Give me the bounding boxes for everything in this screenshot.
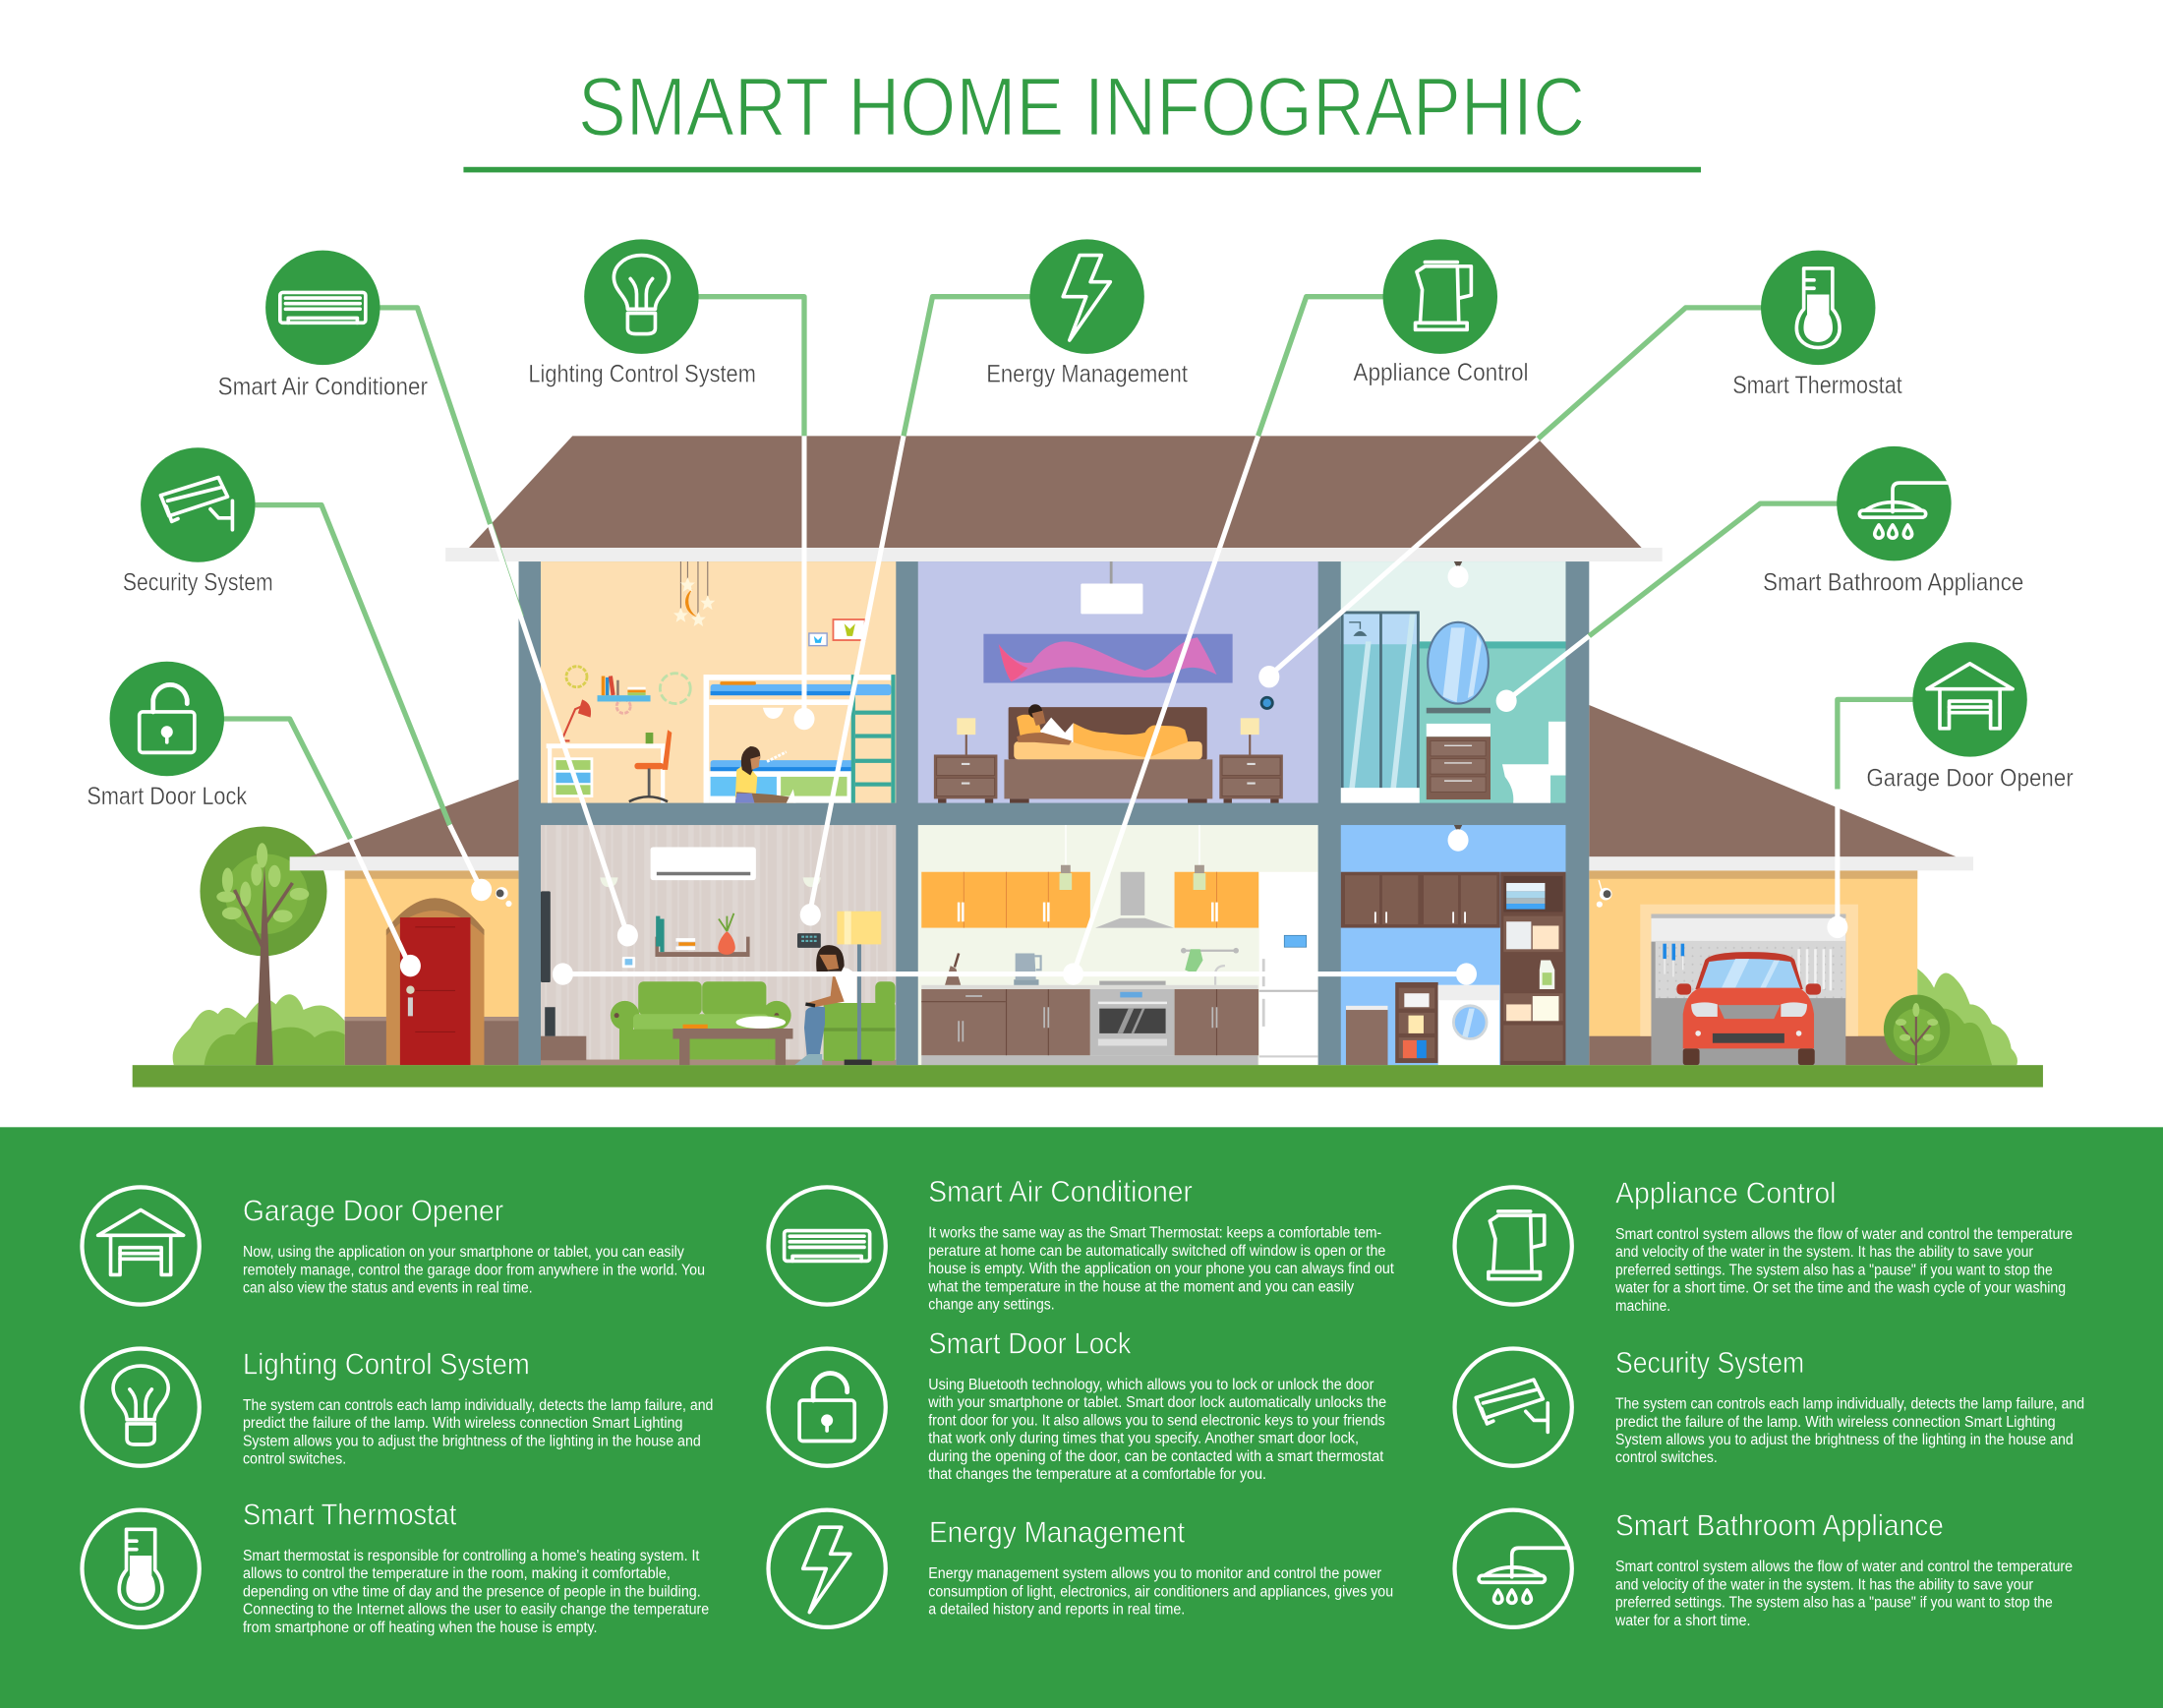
room: laundry [1341,825,1565,1065]
callout: smart air conditioner [218,251,428,400]
feature: smart air conditioner: It works the same way as the Smart Thermostat: keeps a comfortable tem- [928,1225,1381,1242]
feature: smart bathroom appliance: Smart Bathroom Appliance [1615,1508,1944,1543]
panel: feature descriptions [0,1127,2163,1708]
connector: energy management [800,297,1030,925]
feature: smart door lock: front door for you. It also allows you to send electronic keys to your friends [928,1412,1385,1429]
callout: smart bathroom appliance [1763,446,2023,597]
feature: energy management: Energy Management [929,1515,1186,1550]
illustration: main house roof [445,436,1663,561]
feature: smart door lock: with your smartphone or tablet. Smart door lock automatically unlocks the [927,1394,1386,1411]
feature: smart air conditioner: Smart Air Conditioner [928,1174,1193,1208]
callout: smart door lock: Smart Door Lock [87,784,248,810]
feature: smart bathroom appliance: Smart control system allows the flow of water and control the temperature [1615,1559,2073,1575]
connector: appliance control [553,297,1477,985]
feature: lighting control system: Lighting Control System [243,1346,530,1381]
feature: smart bathroom appliance: preferred settings. The system also has a "pause" if you want to stop the [1615,1595,2053,1612]
feature: smart door lock [769,1325,1386,1483]
feature: lighting control system: control switches. [243,1451,346,1468]
feature: security system: control switches. [1615,1449,1718,1466]
room: master bedroom [918,561,1318,803]
room: bathroom [1341,561,1565,803]
feature: garage door opener [82,1187,705,1305]
feature: security system [1455,1345,2084,1466]
feature: smart door lock: that changes the temperature at a comfortable for you. [928,1466,1266,1483]
callout: appliance control: Appliance Control [1353,360,1529,386]
feature: appliance control: machine. [1615,1298,1670,1315]
feature: smart thermostat: depending on vthe time of day and the presence of people in the building. [243,1583,701,1600]
feature: smart air conditioner: what the temperature in the house at the moment and you can easily [927,1278,1354,1295]
callout: smart air conditioner: Smart Air Conditioner [218,374,428,400]
feature: appliance control: water for a short time. Or set the time and the wash cycle of your washing [1614,1280,2066,1297]
illustration: main house walls [519,561,1589,1065]
callout: security system: Security System [123,570,273,597]
lamps in bathroom and laundry [1448,561,1469,852]
connector: smart air conditioner [380,308,638,947]
feature: garage door opener: can also view the status and events in real time. [243,1280,533,1297]
feature: energy management: Energy management system allows you to monitor and control the power [928,1565,1381,1582]
callout: smart bathroom appliance: Smart Bathroom Appliance [1763,570,2023,597]
connector: smart door lock [223,719,421,976]
feature: garage door opener: Garage Door Opener [243,1194,503,1228]
room: kitchen [918,825,1318,1065]
callout: smart thermostat: Smart Thermostat [1732,373,1902,399]
illustration: garage camera and red car [1597,880,1821,1065]
feature: smart thermostat: from smartphone or off heating when the house is empty. [243,1620,598,1636]
connector: garage door opener [1827,699,1913,938]
connector: smart bathroom appliance [1496,503,1838,712]
connector: security system [256,505,492,901]
feature: smart thermostat: Smart thermostat is responsible for controlling a home's heating system. It [243,1548,700,1564]
feature: smart thermostat: Connecting to the Internet allows the user to easily change the temperature [243,1602,709,1619]
feature: appliance control: Smart control system allows the flow of water and control the temperature [1615,1226,2073,1243]
feature: appliance control: preferred settings. The system also has a "pause" if you want to stop the [1615,1262,2053,1278]
feature: smart door lock: that work only during times that you specify. Another smart door lock, [928,1431,1359,1447]
feature: smart air conditioner [769,1174,1394,1314]
illustration: right bushes and small tree [1884,969,2017,1065]
callout: smart thermostat [1732,251,1902,399]
feature: smart air conditioner: house is empty. With the application on your phone you can always find out [928,1261,1394,1277]
feature: smart bathroom appliance: water for a short time. [1614,1613,1750,1629]
feature: appliance control [1455,1175,2073,1315]
feature: appliance control: and velocity of the water in the system. It has the ability to save your [1615,1244,2033,1261]
feature: garage door opener: remotely manage, control the garage door from anywhere in the world. You [243,1262,705,1278]
callout: smart door lock [87,662,248,810]
feature: garage door opener: Now, using the application on your smartphone or tablet, you can easily [243,1244,684,1261]
feature: security system: Security System [1615,1345,1804,1380]
feature: security system: The system can controls each lamp individually, detects the lamp failure, and [1615,1396,2084,1413]
feature: smart door lock: Using Bluetooth technology, which allows you to lock or unlock the door [928,1377,1374,1393]
callout: garage door opener: Garage Door Opener [1866,766,2074,793]
feature: security system: System allows you to adjust the brightness of the lighting in the house and [1615,1432,2074,1448]
feature: lighting control system: The system can controls each lamp individually, detects the lamp failure, and [243,1397,713,1414]
feature: lighting control system: System allows you to adjust the brightness of the lighting in the house and [243,1433,701,1449]
title: SMART HOME INFOGRAPHIC [578,61,1585,153]
room: kids bedroom [541,561,896,803]
callout: lighting control system [528,239,756,388]
feature: smart air conditioner: change any settings. [928,1297,1055,1314]
feature: smart thermostat [82,1497,709,1636]
feature: lighting control system: predict the failure of the lamp. With wireless connection Smart Lighting [243,1415,683,1432]
feature: smart thermostat: allows to control the temperature in the room, making it comfortable, [243,1565,671,1582]
callout: appliance control [1353,239,1529,386]
connector: lighting control system [698,297,815,730]
feature: lighting control system [82,1346,713,1468]
callout: garage door opener [1866,642,2074,793]
callout: security system [123,447,273,597]
callout: lighting control system: Lighting Control System [528,362,756,388]
feature: energy management: a detailed history and reports in real time. [928,1602,1185,1619]
feature: smart bathroom appliance [1455,1508,2073,1629]
feature: smart door lock: during the opening of the door, can be contacted with a smart thermostat [928,1448,1384,1465]
feature: appliance control: Appliance Control [1615,1175,1836,1209]
feature: smart air conditioner: perature at home can be automatically switched off window is open or the [928,1243,1385,1260]
illustration: front door camera [496,887,512,907]
feature: smart bathroom appliance: and velocity of the water in the system. It has the ability to save your [1615,1576,2033,1593]
illustration: ground strip [133,1065,2043,1088]
feature: energy management [769,1510,1393,1627]
illustration: tree and bushes on the left [173,826,345,1065]
illustration: left wing with front door [290,780,519,1065]
room: living room [541,825,896,1065]
callout: energy management: Energy Management [986,362,1188,388]
callout: energy management [986,239,1188,388]
feature: security system: predict the failure of the lamp. With wireless connection Smart Lighting [1615,1414,2056,1431]
connector: smart thermostat [1258,308,1762,687]
feature: smart thermostat: Smart Thermostat [243,1497,457,1531]
illustration: right wing with garage [1589,705,1973,1065]
feature: energy management: consumption of light, electronics, air conditioners and appliances, gives you [928,1583,1393,1600]
feature: smart door lock: Smart Door Lock [928,1325,1132,1360]
